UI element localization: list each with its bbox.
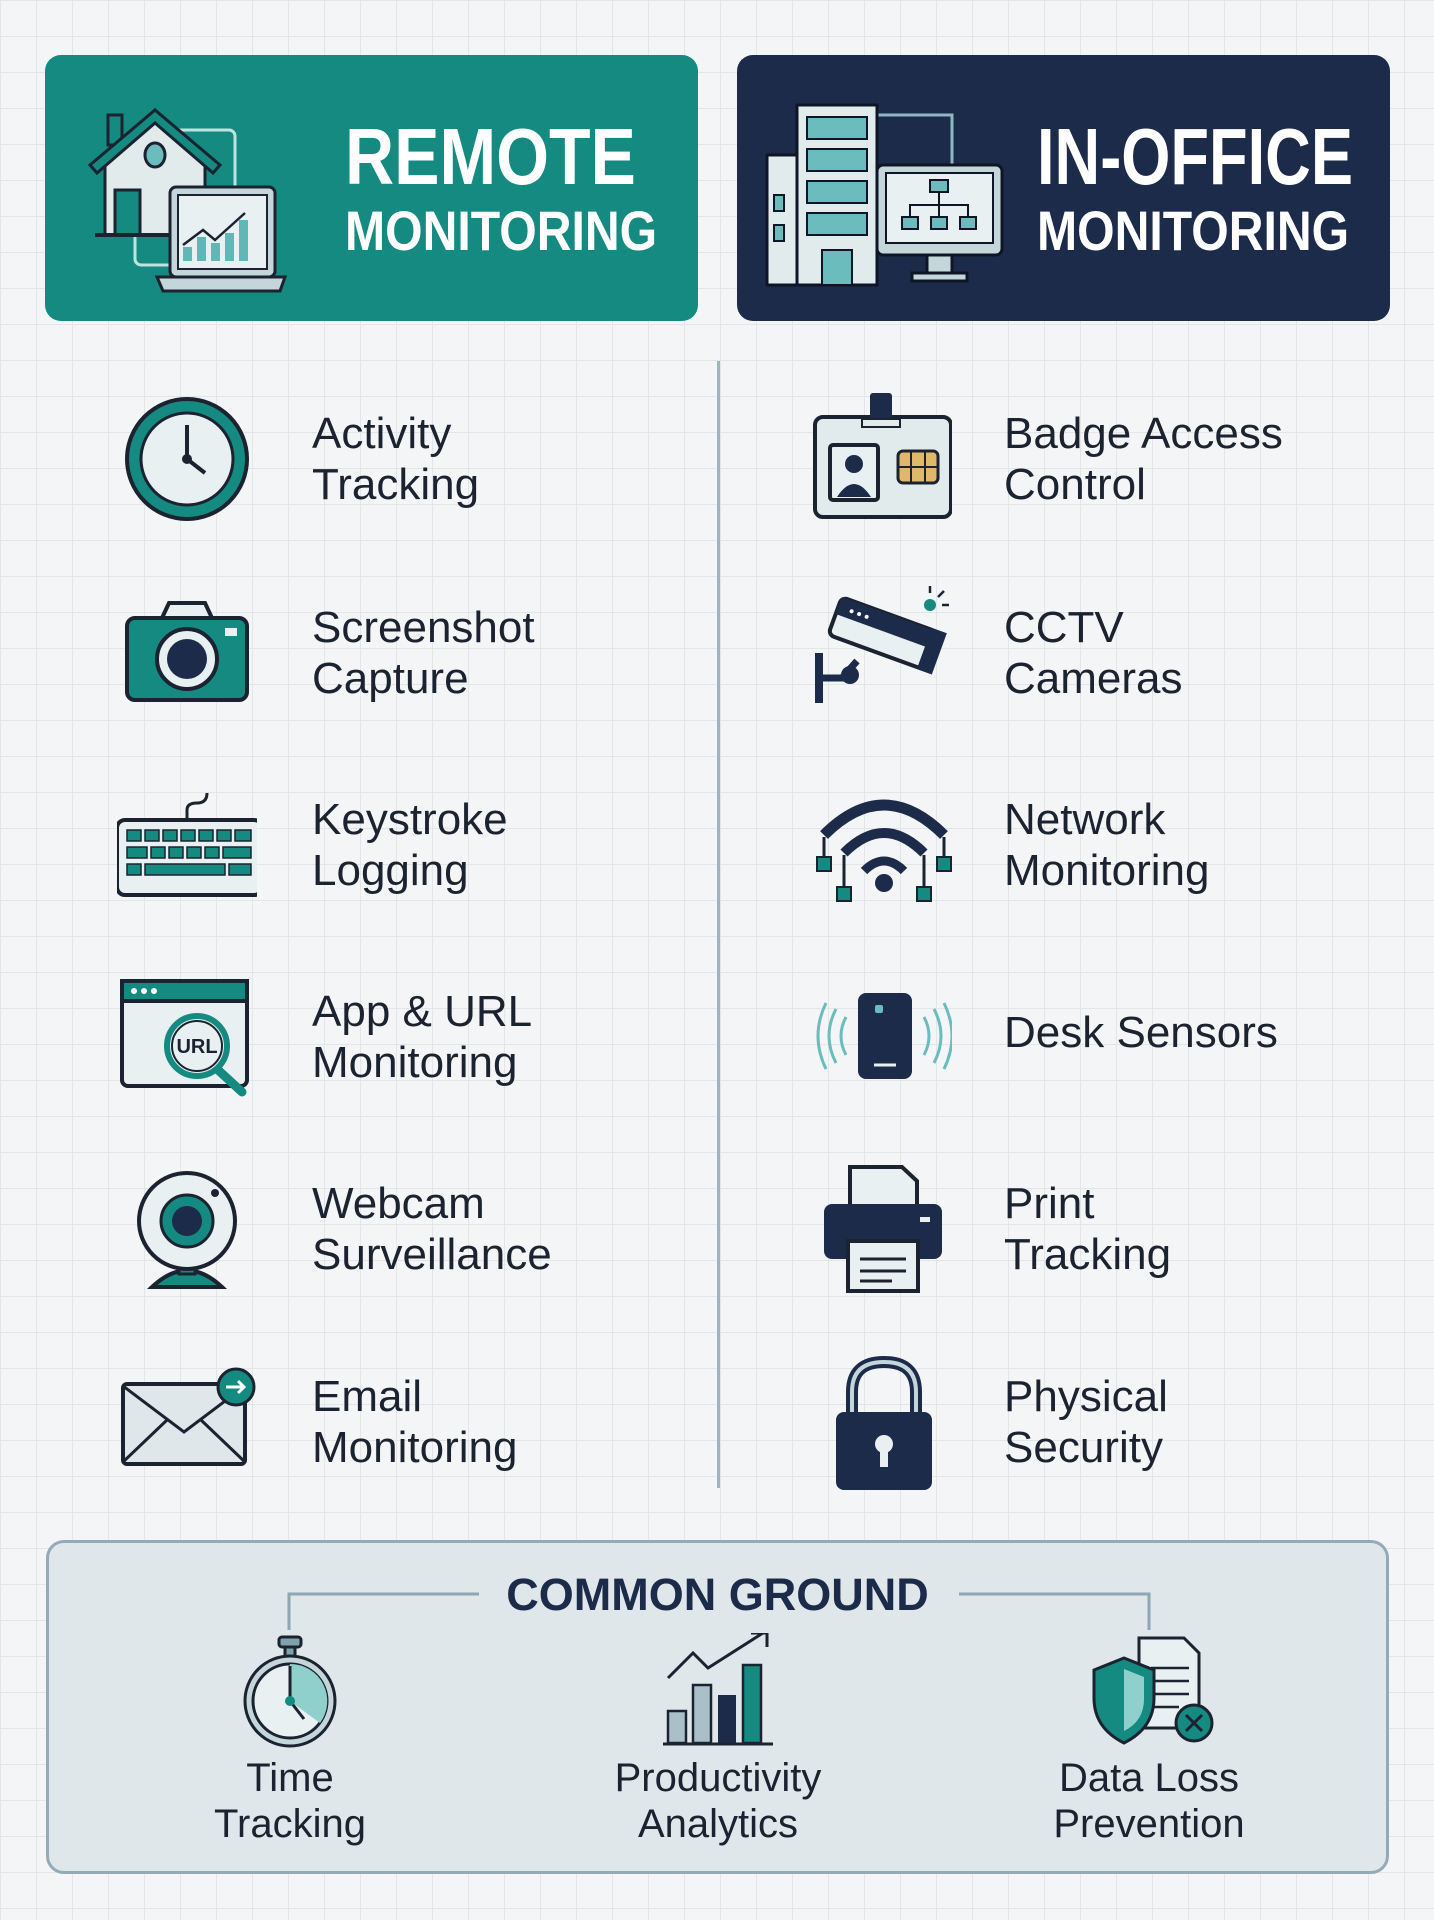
icon: house and laptop bbox=[88, 108, 288, 292]
label: Activity bbox=[312, 409, 451, 458]
office item: print tracking: Print bbox=[1004, 1179, 1094, 1228]
header: remote monitoring: REMOTE bbox=[345, 112, 636, 201]
remote item: screenshot capture: Capture bbox=[312, 654, 469, 703]
icon: clock bbox=[125, 397, 249, 521]
header: remote monitoring bbox=[45, 55, 698, 321]
icon: envelope with arrow bbox=[121, 1368, 256, 1466]
office item: network monitoring: Monitoring bbox=[1004, 846, 1209, 895]
remote item: email monitoring: Monitoring bbox=[312, 1423, 517, 1472]
office item: desk sensors: Desk Sensors bbox=[1004, 1008, 1278, 1057]
item: data loss prevention: Data Loss bbox=[1059, 1756, 1239, 1800]
header: remote monitoring: MONITORING bbox=[345, 199, 657, 262]
icon: printer bbox=[824, 1165, 942, 1293]
office item: cctv cameras bbox=[815, 586, 1182, 703]
item: data loss prevention bbox=[1053, 1636, 1245, 1846]
remote item: email monitoring: Email bbox=[312, 1372, 422, 1421]
icon: webcam bbox=[137, 1171, 237, 1289]
remote item: app & url monitoring: App & URL bbox=[312, 987, 532, 1036]
label: Tracking bbox=[312, 460, 479, 509]
item: productivity analytics: Productivity bbox=[615, 1756, 821, 1800]
icon: camera bbox=[125, 601, 249, 702]
remote item: app & url monitoring: Monitoring bbox=[312, 1038, 517, 1087]
header: in-office monitoring: IN-OFFICE bbox=[1037, 112, 1353, 201]
label bbox=[312, 409, 479, 509]
office item: cctv cameras: Cameras bbox=[1004, 654, 1182, 703]
panel: common ground bbox=[46, 1540, 1389, 1874]
icon: ID badge bbox=[813, 393, 952, 519]
icon: CCTV camera bbox=[815, 586, 949, 703]
icon: wifi network bbox=[816, 800, 952, 902]
icon: sensor with waves bbox=[816, 993, 952, 1079]
header: in-office monitoring bbox=[737, 55, 1390, 321]
remote item: screenshot capture bbox=[125, 601, 535, 703]
remote item: keystroke logging bbox=[117, 793, 508, 897]
remote item: webcam surveillance: Webcam bbox=[312, 1179, 485, 1228]
remote item: keystroke logging: Logging bbox=[312, 846, 469, 895]
connector lines bbox=[288, 1592, 1150, 1630]
remote item: activity tracking bbox=[125, 397, 479, 521]
remote item: screenshot capture: Screenshot bbox=[312, 603, 535, 652]
item: time tracking bbox=[214, 1636, 366, 1846]
office item: badge access control: Badge Access bbox=[1004, 409, 1283, 458]
icon: padlock bbox=[836, 1356, 932, 1490]
remote item: webcam surveillance bbox=[137, 1171, 552, 1289]
office item: physical security bbox=[836, 1356, 1168, 1490]
remote item: app & url monitoring bbox=[120, 979, 532, 1096]
item: data loss prevention: Prevention bbox=[1053, 1802, 1245, 1846]
header: in-office monitoring: MONITORING bbox=[1037, 199, 1349, 262]
item: time tracking: Time bbox=[246, 1756, 334, 1800]
title: COMMON GROUND bbox=[506, 1569, 929, 1620]
divider bbox=[717, 361, 720, 1488]
office item: badge access control: Control bbox=[1004, 460, 1146, 509]
icon: browser with URL magnifier bbox=[120, 979, 249, 1096]
icon: building and monitor bbox=[766, 104, 1004, 286]
icon: browser with URL magnifier: URL bbox=[176, 1036, 218, 1058]
icon: keyboard bbox=[117, 793, 257, 897]
item: productivity analytics: Analytics bbox=[638, 1802, 798, 1846]
office item: physical security: Security bbox=[1004, 1423, 1163, 1472]
remote item: email monitoring bbox=[121, 1368, 517, 1472]
office item: network monitoring: Network bbox=[1004, 795, 1165, 844]
remote item: keystroke logging: Keystroke bbox=[312, 795, 508, 844]
office item: network monitoring bbox=[816, 795, 1209, 902]
office item: print tracking: Tracking bbox=[1004, 1230, 1171, 1279]
item: productivity analytics bbox=[615, 1633, 822, 1846]
office item: physical security: Physical bbox=[1004, 1372, 1168, 1421]
remote item: webcam surveillance: Surveillance bbox=[312, 1230, 552, 1279]
office item: desk sensors bbox=[816, 993, 1278, 1079]
office item: badge access control bbox=[813, 393, 1283, 519]
office item: print tracking bbox=[824, 1165, 1171, 1293]
item: time tracking: Tracking bbox=[214, 1802, 366, 1846]
office item: cctv cameras: CCTV bbox=[1004, 603, 1124, 652]
